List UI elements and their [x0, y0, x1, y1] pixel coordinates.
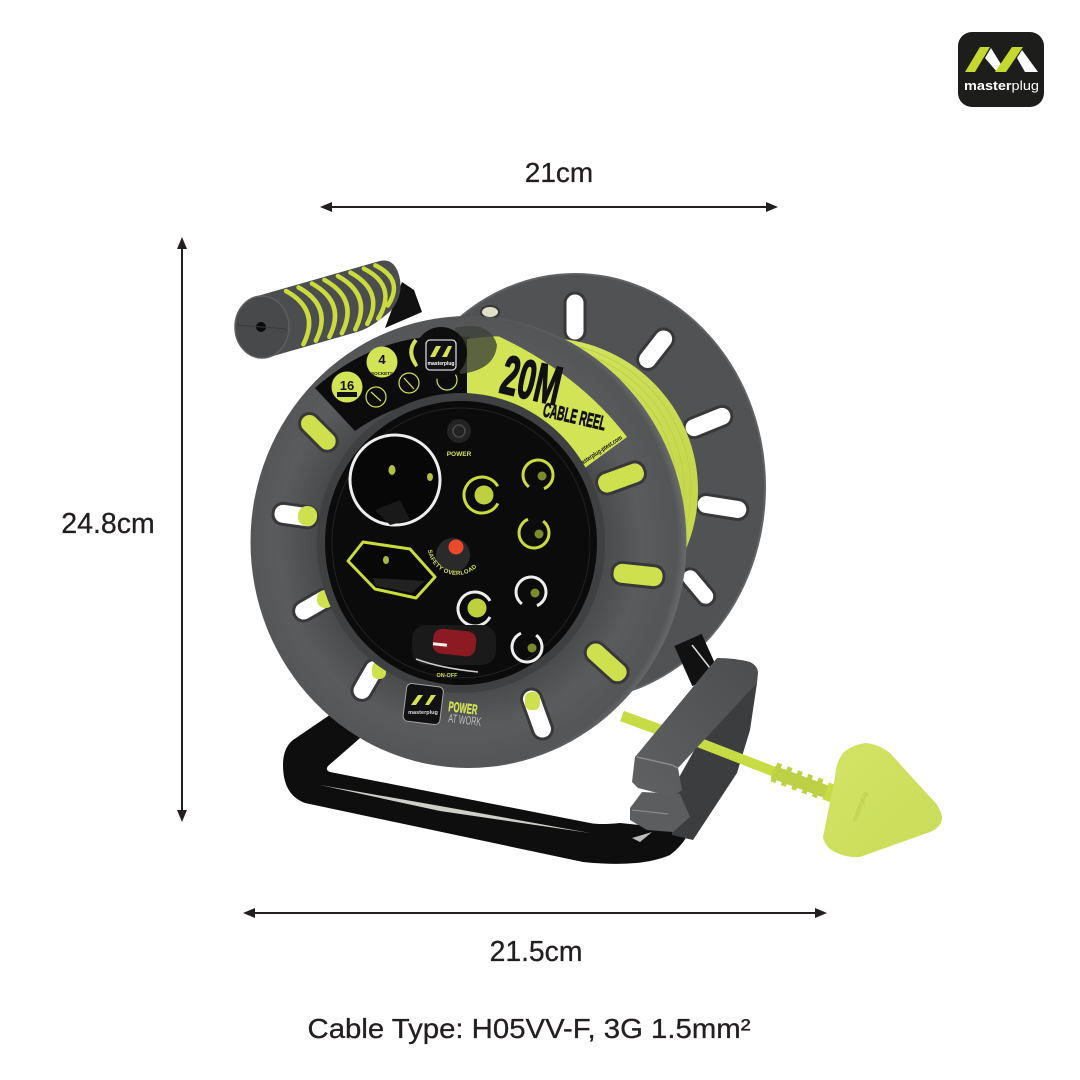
- round socket: [350, 435, 440, 525]
- lime socket group: [458, 454, 559, 554]
- cable through clip: [690, 739, 775, 772]
- icon: 4 sockets: 4: [378, 352, 386, 367]
- moulded plug: masterplug: [851, 791, 870, 823]
- clip top bar: [632, 658, 758, 797]
- hexagonal socket: [348, 542, 435, 598]
- lower tab: [630, 792, 690, 832]
- strain relief: [773, 772, 842, 797]
- clip back: [672, 680, 757, 840]
- icon: 16 amp: [332, 372, 362, 402]
- icon: 16 amp: 16: [340, 378, 354, 393]
- cable type caption: Cable Type: H05VV-F, 3G 1.5mm²: [308, 1013, 750, 1044]
- lime 20M label: CABLE REEL: [541, 400, 608, 435]
- dimension: base width: 21.5cm: [490, 935, 582, 967]
- power at work badge: masterplug: [408, 710, 438, 716]
- power at work badge: [403, 683, 482, 730]
- plug holder knob: masterplug: [428, 361, 454, 367]
- brand logo: [958, 32, 1044, 107]
- dimension: reel width: 21cm: [525, 157, 593, 188]
- control hub: [317, 393, 605, 693]
- icon: 4 sockets: SOCKETS: [371, 371, 393, 376]
- power button: POWER: [447, 451, 472, 458]
- moulded plug: [823, 743, 942, 857]
- icon: outline badges: [366, 340, 457, 407]
- power at work badge: POWER: [448, 700, 478, 718]
- power button: [447, 419, 472, 458]
- rear flange: [385, 274, 765, 700]
- tubular stand: [283, 708, 695, 864]
- lime pieces visible in the slots: [297, 505, 540, 710]
- cable clip block: [630, 658, 775, 840]
- lime cable drum: [388, 338, 698, 642]
- white socket group: [452, 571, 552, 668]
- cable behind clip: [622, 716, 690, 741]
- on-off switch: [412, 625, 496, 679]
- black icon label: [315, 336, 470, 431]
- on-off switch: ON-OFF: [436, 673, 458, 679]
- carry handle: [235, 257, 422, 358]
- dimension: base width: [243, 908, 827, 967]
- lime 20M label: [467, 336, 627, 470]
- safety overload button: [428, 538, 476, 576]
- logo wordmark: master plug: [964, 78, 1039, 93]
- dimension: reel width: [320, 157, 778, 212]
- dimension: height: 24.8cm: [61, 508, 155, 540]
- product: cable reel: [234, 260, 942, 864]
- safety overload button: SAFETY OVERLOAD: [428, 550, 476, 576]
- plug holder knob: [415, 326, 497, 379]
- power at work badge: AT WORK: [448, 712, 482, 730]
- flange slots: [272, 409, 665, 742]
- lime 20M label: masterplug-ptest.com: [576, 434, 624, 469]
- dimension: height: [61, 237, 187, 822]
- lime 20M label: 20M: [495, 345, 567, 417]
- icon: 4 sockets: [366, 346, 398, 378]
- front flange: [250, 316, 686, 768]
- logo mark: [965, 47, 1038, 72]
- rear strut of stand: [688, 640, 710, 680]
